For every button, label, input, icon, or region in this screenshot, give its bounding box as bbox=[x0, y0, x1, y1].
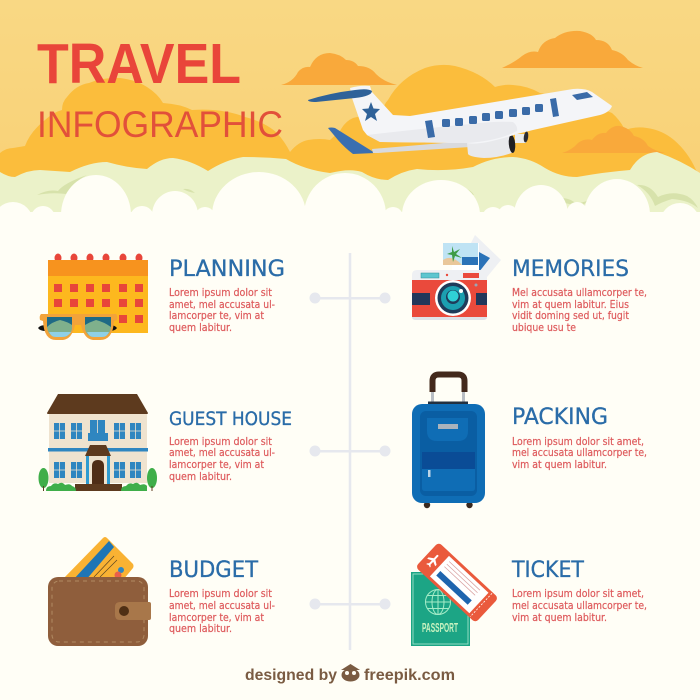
text: budget body: Lorem ipsum dolor sit bbox=[169, 589, 272, 600]
footer credit: freepik.com bbox=[364, 667, 455, 684]
text: guest house body: lamcorper te, vim at bbox=[169, 460, 264, 471]
text: budget body: lamcorper te, vim at bbox=[169, 613, 264, 624]
text: memories body bbox=[512, 288, 647, 334]
text: packing body: vim at quem labitur. bbox=[512, 460, 607, 471]
wing bbox=[367, 122, 517, 143]
text: guest house body: Lorem ipsum dolor sit bbox=[169, 437, 272, 448]
text: planning body bbox=[169, 288, 275, 334]
footer credit bbox=[245, 664, 455, 684]
sun hills bbox=[0, 65, 700, 200]
sunglasses bbox=[38, 314, 117, 340]
text: guest house body: quem labitur. bbox=[169, 472, 232, 483]
text: budget body: amet, mel accusata ul- bbox=[169, 601, 275, 612]
text: planning body: amet, mel accusata ul- bbox=[169, 300, 275, 311]
text: planning body: quem labitur. bbox=[169, 323, 232, 334]
text: packing body bbox=[512, 437, 647, 471]
heading: planning: PLANNING bbox=[169, 257, 285, 282]
title: TRAVEL: TRAVEL bbox=[37, 32, 241, 96]
text: ticket body: Lorem ipsum dolor sit amet, bbox=[512, 589, 644, 600]
text: planning body: Lorem ipsum dolor sit bbox=[169, 288, 272, 299]
icon: camera with photos bbox=[412, 235, 501, 320]
text: packing body: Lorem ipsum dolor sit amet, bbox=[512, 437, 644, 448]
icon: calendar with sunglasses bbox=[38, 254, 148, 340]
text: guest house body bbox=[169, 437, 275, 483]
timeline bbox=[310, 253, 390, 650]
windows bbox=[425, 92, 593, 138]
orange cloud left bbox=[281, 53, 397, 85]
fin and fuselage bbox=[350, 86, 612, 144]
heading: budget: BUDGET bbox=[169, 558, 259, 583]
icon: guest house bbox=[38, 394, 157, 491]
text: memories body: vidit doming sed ut, fugit bbox=[512, 311, 629, 322]
text: memories body: ubique usu te bbox=[512, 323, 576, 334]
text: planning body: lamcorper te, vim at bbox=[169, 311, 264, 322]
birds bbox=[37, 175, 698, 208]
title: INFOGRAPHIC: INFOGRAPHIC bbox=[37, 104, 283, 145]
text: ticket body: mel accusata ullamcorper te, bbox=[512, 601, 647, 612]
wing underside strip bbox=[372, 130, 516, 153]
orange cloud right bbox=[502, 31, 643, 68]
text: memories body: vim at quem labitur. Eius bbox=[512, 300, 629, 311]
text: memories body: Mel accusata ullamcorper te, bbox=[512, 288, 647, 299]
ticket bbox=[415, 542, 499, 623]
passport label: PASSPORT bbox=[422, 621, 458, 635]
globe bbox=[426, 590, 450, 614]
heading: memories: MEMORIES bbox=[512, 257, 629, 282]
text: budget body: quem labitur. bbox=[169, 624, 232, 635]
engine bbox=[467, 135, 514, 158]
heading: packing: PACKING bbox=[512, 405, 608, 430]
lower stabilizer bbox=[328, 128, 375, 154]
panel: sky header bbox=[0, 0, 700, 258]
icon: airplane bbox=[308, 86, 612, 158]
text: ticket body bbox=[512, 589, 647, 624]
icon: freepik logo bbox=[341, 664, 360, 682]
star bbox=[362, 102, 380, 121]
icon: wallet with card bbox=[48, 537, 151, 646]
white clouds bbox=[0, 172, 700, 258]
far engine bbox=[515, 134, 526, 143]
footer credit: designed by bbox=[245, 667, 337, 684]
text: guest house body: amet, mel accusata ul- bbox=[169, 448, 275, 459]
text: budget body bbox=[169, 589, 275, 635]
pale green band bbox=[0, 152, 700, 225]
icon: suitcase bbox=[412, 374, 485, 508]
text: ticket body: vim at quem labitur. bbox=[512, 613, 607, 624]
heading: guest house: GUEST HOUSE bbox=[169, 409, 292, 430]
orange cloud lower bbox=[562, 126, 665, 153]
icon: passport and ticket bbox=[411, 542, 499, 646]
text: packing body: mel accusata ullamcorper te, bbox=[512, 448, 647, 459]
heading: ticket: TICKET bbox=[511, 558, 585, 583]
